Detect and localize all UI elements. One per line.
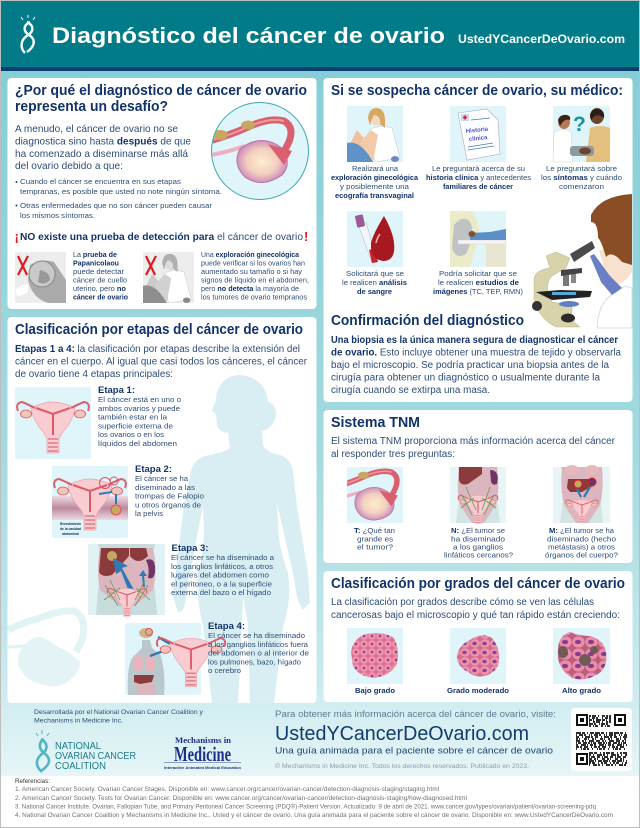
heading: Sistema TNM (331, 415, 420, 431)
stage 3: Etapa 3: (172, 543, 208, 554)
references: Referencias: (15, 779, 50, 785)
M caption: órganos del cuerpo? (545, 552, 618, 560)
T image (347, 467, 403, 523)
references: 3. National Cancer Institute. Ovarian, Fallopian Tube, and Primary Peritoneal Cancer Screening (PDQ®)-Patient Version. Actualizado: 9 de abril de 2021. www.cancer.gov/types/ovarian/patient/ovarian-screening-pdq (15, 804, 596, 810)
panel: if ovarian cancer is suspected (324, 78, 632, 402)
M caption: diseminado (hecho (547, 536, 616, 544)
caption (331, 166, 418, 200)
developer credit: Mechanisms in Medicine Inc. (34, 718, 123, 724)
logo: Mechanisms in Medicine (164, 736, 241, 770)
N caption: linfáticos cercanos? (444, 552, 513, 560)
pelvic exam text: puede verificar si los ovarios han (201, 260, 305, 268)
T caption (354, 528, 395, 552)
stage 2: u otros órganos de (135, 502, 201, 510)
icon: pelvic exam crossed out (143, 252, 194, 303)
low grade cells (347, 628, 403, 684)
Pap test text: cáncer de cuello (73, 278, 127, 284)
low grade label: Bajo grado (355, 688, 395, 695)
intro (331, 436, 616, 460)
logo: National Ovarian Cancer Coalition: OVARIAN CANCER (55, 751, 136, 762)
caption: Le preguntará acerca de su (432, 166, 525, 173)
caption (342, 271, 407, 296)
stage 3 (88, 543, 274, 616)
caption: historia clínica y antecedentes (426, 175, 532, 182)
woman silhouette (8, 375, 310, 703)
Pap test text: Papanicolaou (73, 260, 119, 268)
intro: El sistema TNM proporciona más información acerca del cáncer (331, 436, 616, 447)
stage 2: diseminado a las (135, 485, 196, 492)
panel: staging (8, 317, 316, 703)
caption: Solicitará que se (346, 271, 404, 278)
biopsy text (331, 335, 622, 396)
high grade label: Alto grado (562, 688, 601, 695)
heading: representa un desafío? (15, 99, 168, 115)
bullets: Otras enfermedades que no son cáncer pueden causar (20, 201, 213, 210)
M image (553, 465, 610, 523)
biopsy text: Una biopsia es la única manera segura de diagnosticar el cáncer (331, 335, 618, 346)
no screening test callout (14, 229, 308, 244)
references: 4. National Ovarian Cancer Coalition y Mechanisms in Medicine Inc., Usted y el cáncer de ovario. Una guía animada para el paciente sobre el cáncer de ovario. Disponible en: www.UstedYCancerDeOvario.com (15, 813, 613, 819)
intro text: diagnostica sino hasta después de que (15, 136, 191, 148)
Pap test text (73, 252, 128, 302)
illustration: scientist at microscope (532, 194, 632, 328)
icon: doctor and patient with question mark: ? (573, 113, 586, 136)
logo: Mechanisms in Medicine: Mechanisms in (175, 736, 232, 745)
panel: why diagnosis is a challenge (8, 78, 316, 309)
stage 2: la pelvis (135, 511, 164, 518)
N caption: a los ganglios (453, 544, 504, 552)
logo: National Ovarian Cancer Coalition: NATIONAL (55, 741, 101, 752)
bullets: los mismos síntomas. (20, 211, 95, 220)
Pap test text: uterino, pero no (73, 286, 126, 293)
intro: La clasificación por grados describe cómo se ven las células (331, 597, 594, 608)
stage 1: los ovarios o en los (98, 432, 165, 439)
website callout: UstedYCancerDeOvario.com (275, 723, 529, 745)
caption: Podría solicitar que se (439, 271, 517, 278)
stage 2: Revestimiento (60, 522, 82, 526)
icon: medical history: Historia (466, 127, 489, 135)
intro: cancerosas bajo el microscopio y qué tan rápido están creciendo: (331, 610, 620, 621)
logo: National Ovarian Cancer Coalition (36, 730, 136, 772)
N caption (444, 528, 513, 560)
stage 3: externa del bazo o el hígado (171, 590, 271, 597)
icon: blood test (347, 211, 403, 267)
biopsy text: de ovario. Esto incluye obtener una muestra de tejido y observarla (331, 348, 622, 358)
biopsy text: cirugía cuando se extirpa una masa. (331, 385, 490, 396)
Pap test text: cáncer de ovario (73, 294, 128, 302)
stage 4: del abdomen o al interior de (208, 650, 309, 658)
QR code (571, 708, 632, 771)
bullets: Cuando el cáncer se encuentra en sus etapas (20, 177, 181, 186)
stage 4: a los ganglios linfáticos fuera (208, 642, 308, 649)
biopsy text: cirugía para obtener un diagnóstico o usualmente durante la (331, 372, 601, 384)
moderate grade label: Grado moderado (447, 688, 509, 695)
pelvic exam text (201, 252, 309, 302)
intro text: A menudo, el cáncer de ovario no se (15, 124, 178, 135)
T caption: grande es (357, 536, 394, 544)
heading: ¿Por qué el diagnóstico de cáncer de ovario (15, 83, 307, 99)
caption: le realicen estudios de (438, 280, 519, 287)
stage 4: Etapa 4: (208, 621, 245, 632)
caption: comenzaron (559, 184, 604, 191)
references (15, 779, 613, 819)
logo: National Ovarian Cancer Coalition: COALITION (55, 761, 106, 772)
title: Diagnóstico del cáncer de ovario (52, 23, 445, 48)
stage 3: el peritoneo, o a la superficie (171, 582, 272, 588)
stage 3: los ganglios linfáticos, a otros (171, 564, 274, 571)
stage 2: de la cavidad (60, 527, 81, 531)
website callout: Una guía animada para el paciente sobre el cáncer de ovario (275, 744, 553, 756)
intro: Etapas 1 a 4: la clasificación por etapas describe la extensión del (15, 344, 300, 355)
moderate grade cells (450, 628, 506, 684)
heading: Clasificación por etapas del cáncer de ovario (15, 322, 303, 338)
no screening test callout: ¡ (14, 229, 19, 244)
intro (331, 597, 620, 621)
heading: Si se sospecha cáncer de ovario, su médico: (331, 83, 623, 99)
stage 1: Etapa 1: (98, 385, 135, 396)
intro: cáncer en el cuerpo. Al igual que casi todos los cánceres, el cáncer (15, 356, 308, 368)
caption (541, 166, 622, 191)
N caption: ha diseminado (451, 536, 505, 544)
intro text (15, 124, 191, 172)
pelvic exam text: pero no detecta la mayoría de (201, 286, 299, 293)
caption: le realicen análisis (342, 280, 407, 287)
icon: doctor and patient with question mark (553, 106, 610, 162)
header banner (0, 1, 640, 71)
illustration: ovary in circle (205, 102, 308, 200)
stage 1 (15, 385, 181, 459)
intro text: ha comenzado a diseminarse más allá (15, 149, 188, 160)
faded ovary (8, 611, 84, 687)
stage 3: lugares del abdomen como (171, 572, 269, 580)
panel: grading (324, 571, 632, 702)
icon: ribbon logo (21, 15, 35, 53)
references: 1. American Cancer Society. Ovarian Cancer Stages. Disponible en: www.cancer.org/cancer/ovarian-cancer/detection-diagnosis-staging/staging.html (15, 787, 439, 793)
heading: Confirmación del diagnóstico (331, 313, 524, 329)
developer credit: Desarrollada por el National Ovarian Cancer Coalition y (34, 709, 204, 716)
pelvic exam text: aumentado su tamaño o si hay (201, 269, 303, 276)
intro text: del ovario debido a que: (15, 161, 123, 172)
icon: gynecological exam (347, 106, 403, 162)
icon: medical history: clínica (469, 135, 488, 143)
caption: los síntomas y cuándo (541, 175, 622, 182)
stage 1: El cáncer está en uno o (98, 397, 181, 404)
heading: Clasificación por grados del cáncer de ovario (331, 576, 625, 592)
no screening test callout: NO existe una prueba de detección para el cáncer de ovario (20, 232, 304, 243)
T caption: el tumor? (357, 544, 393, 552)
pelvic exam text: Una exploración ginecológica (201, 252, 299, 259)
M caption: metástasis) a otros (548, 544, 616, 552)
high grade cells (553, 628, 610, 684)
caption (433, 271, 523, 296)
intro: de ovario tiene 4 etapas principales: (15, 369, 173, 380)
stage 4: El cáncer se ha diseminado (208, 633, 305, 640)
icon: medical history (450, 106, 506, 162)
caption: familiares de cáncer (443, 184, 513, 191)
stage 4 (125, 621, 309, 695)
stage 3: El cáncer se ha diseminado a (171, 555, 274, 562)
M caption (545, 528, 618, 560)
website callout: Para obtener más información acerca del cáncer de ovario, visite: (275, 709, 556, 719)
T caption: T: ¿Qué tan (354, 528, 395, 535)
logo: Mechanisms in Medicine: Medicine (174, 742, 231, 766)
bullets: tempranas, es posible que usted no note ningún síntoma. (20, 187, 222, 196)
stage 1: ambos ovarios y puede (98, 406, 180, 413)
caption: ecografía transvaginal (335, 193, 414, 200)
website: UstedYCancerDeOvario.com (458, 32, 625, 46)
panel: TNM system (324, 410, 632, 563)
N image (450, 467, 506, 523)
caption: Le preguntará sobre (546, 166, 617, 173)
references: 2. American Cancer Society. Tests for Ovarian Cancer. Disponible en: www.cancer.org/cancer/ovarian-cancer/detection-diagnosis-staging/how-diagnosed.html (15, 796, 467, 802)
pelvic exam text: los tumores de ovario tempranos (201, 294, 308, 302)
caption: y posiblemente una (340, 184, 409, 191)
stage 4: o cerebro (208, 668, 241, 675)
website callout (275, 709, 556, 770)
Pap test text: La prueba de (73, 252, 117, 259)
stage 1: superficie externa de (98, 424, 173, 430)
website callout: © Mechanisms in Medicine Inc. Todos los derechos reservados. Publicado en 2023. (275, 763, 529, 770)
stage 4: los pulmones, bazo, hígado (208, 660, 301, 666)
developer credit (34, 709, 204, 724)
N caption: N: ¿El tumor se (451, 528, 505, 535)
icon: imaging scanner (450, 211, 506, 267)
caption: Realizará una (352, 166, 398, 173)
stage 2: Etapa 2: (135, 464, 172, 475)
Pap test text: puede detectar (73, 269, 125, 276)
biopsy text: bajo el microscopio. Se podría practicar una biopsia antes de la (331, 360, 610, 371)
pelvic exam text: signos de líquido en el abdomen, (201, 278, 309, 284)
stage 2: trompas de Falopio (135, 494, 204, 500)
logo: Mechanisms in Medicine: Interactive Animated Medical Education (164, 766, 241, 770)
stage 2: El cáncer se ha (135, 476, 188, 483)
stage 2: abdominal (62, 532, 79, 536)
icon: Pap test crossed out (15, 252, 66, 303)
stage 1: líquidos del abdomen (98, 441, 177, 448)
no screening test callout: ! (304, 229, 308, 244)
M caption: M: ¿El tumor se ha (549, 528, 614, 535)
stage 1: también estar en la (98, 414, 167, 422)
caption: de sangre (357, 289, 392, 296)
intro (15, 344, 308, 380)
bullets (16, 177, 222, 220)
intro: al responder tres preguntas: (331, 449, 455, 460)
caption: imágenes (TC, TEP, RMN) (433, 289, 523, 296)
caption: exploración ginecológica (331, 175, 418, 182)
heading (15, 83, 307, 115)
caption (426, 166, 532, 191)
stage 2 (52, 464, 204, 538)
